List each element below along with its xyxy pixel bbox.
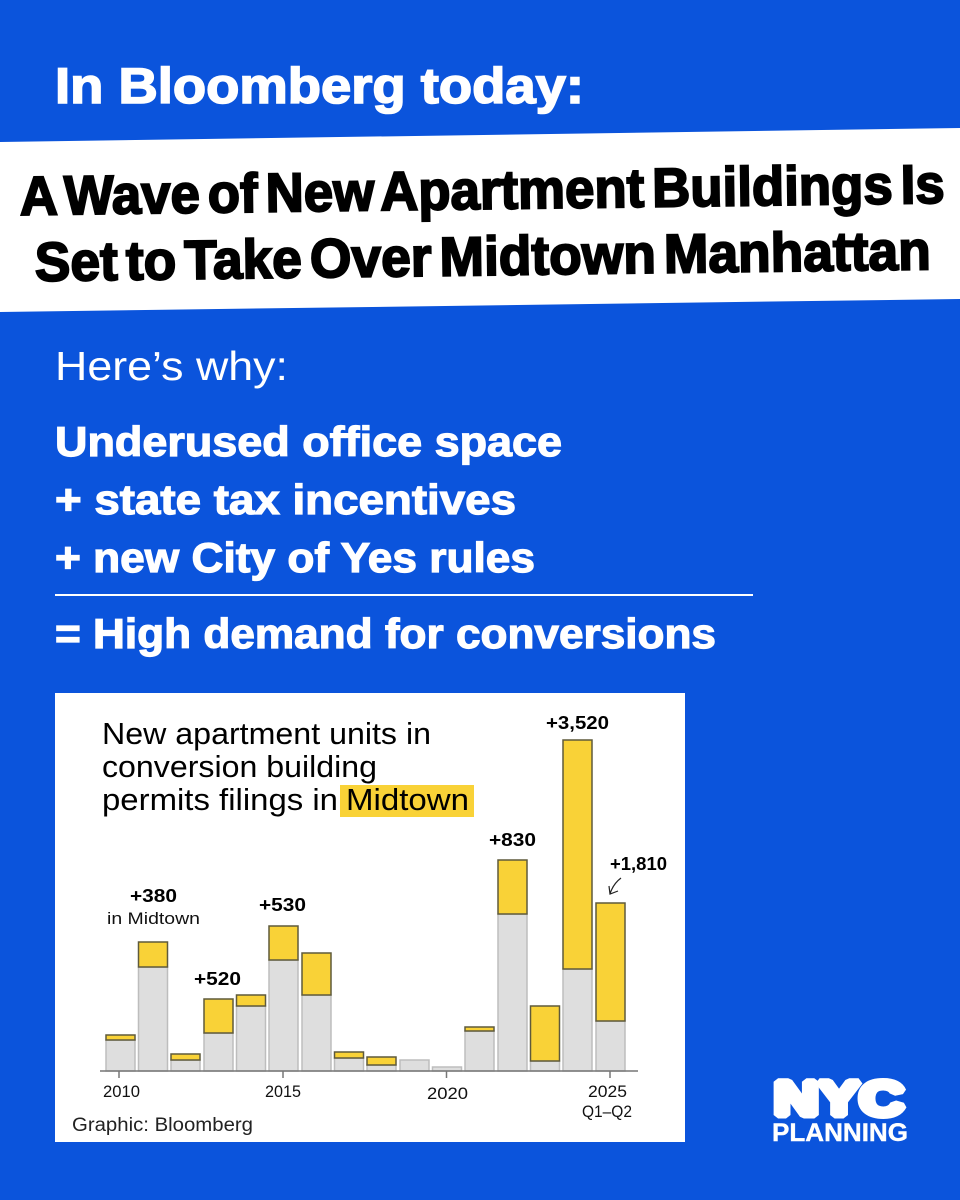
grey bars (106, 914, 625, 1071)
chart title (102, 716, 474, 817)
value labels (130, 713, 667, 989)
headline line 1: A Wave of New Apartment Buildings Is (19, 153, 945, 227)
logo: NYC Planning: PLANNING (772, 1119, 908, 1147)
chart title: Midtown (346, 782, 469, 817)
panel: chart card (55, 693, 685, 1142)
line: new City of Yes rules: + new City of Yes rules (55, 534, 535, 581)
yellow midtown bars (106, 740, 625, 1065)
line: underused office space: Underused office space (55, 418, 562, 465)
axis labels: 2010 (103, 1083, 140, 1101)
chart title: New apartment units in (102, 716, 431, 751)
headline banner (0, 128, 960, 312)
value labels: +3,520 (546, 713, 609, 733)
value labels: +530 (259, 895, 306, 915)
axis labels: 2020 (427, 1085, 468, 1103)
axis labels: 2025 (588, 1083, 627, 1101)
value labels: +830 (489, 830, 536, 850)
text: Here's why: Here’s why: (55, 343, 288, 389)
line: state tax incentives: + state tax incentives (55, 476, 516, 523)
heading: In Bloomberg today: In Bloomberg today: (55, 58, 584, 114)
arrow (609, 878, 621, 894)
logo: NYC Planning: NYC (774, 1073, 904, 1126)
axis labels (103, 1083, 632, 1121)
chart title: conversion building (102, 749, 377, 784)
value labels: +380 (130, 886, 177, 906)
value labels: +520 (194, 969, 241, 989)
bar chart (100, 713, 667, 1121)
source credit: Graphic: Bloomberg (72, 1115, 253, 1136)
equation text block (55, 418, 753, 657)
headline line 2: Set to Take Over Midtown Manhattan (34, 219, 931, 293)
axis labels: Q1–Q2 (582, 1103, 632, 1121)
logo: NYC Planning (772, 1073, 908, 1147)
chart title: permits filings in (102, 782, 338, 817)
label: in Midtown: in Midtown (107, 909, 200, 928)
value labels: +1,810 (610, 854, 667, 874)
x axis (100, 1071, 638, 1078)
line: high demand for conversions: = High demand for conversions (55, 610, 716, 657)
axis labels: 2015 (265, 1083, 301, 1101)
